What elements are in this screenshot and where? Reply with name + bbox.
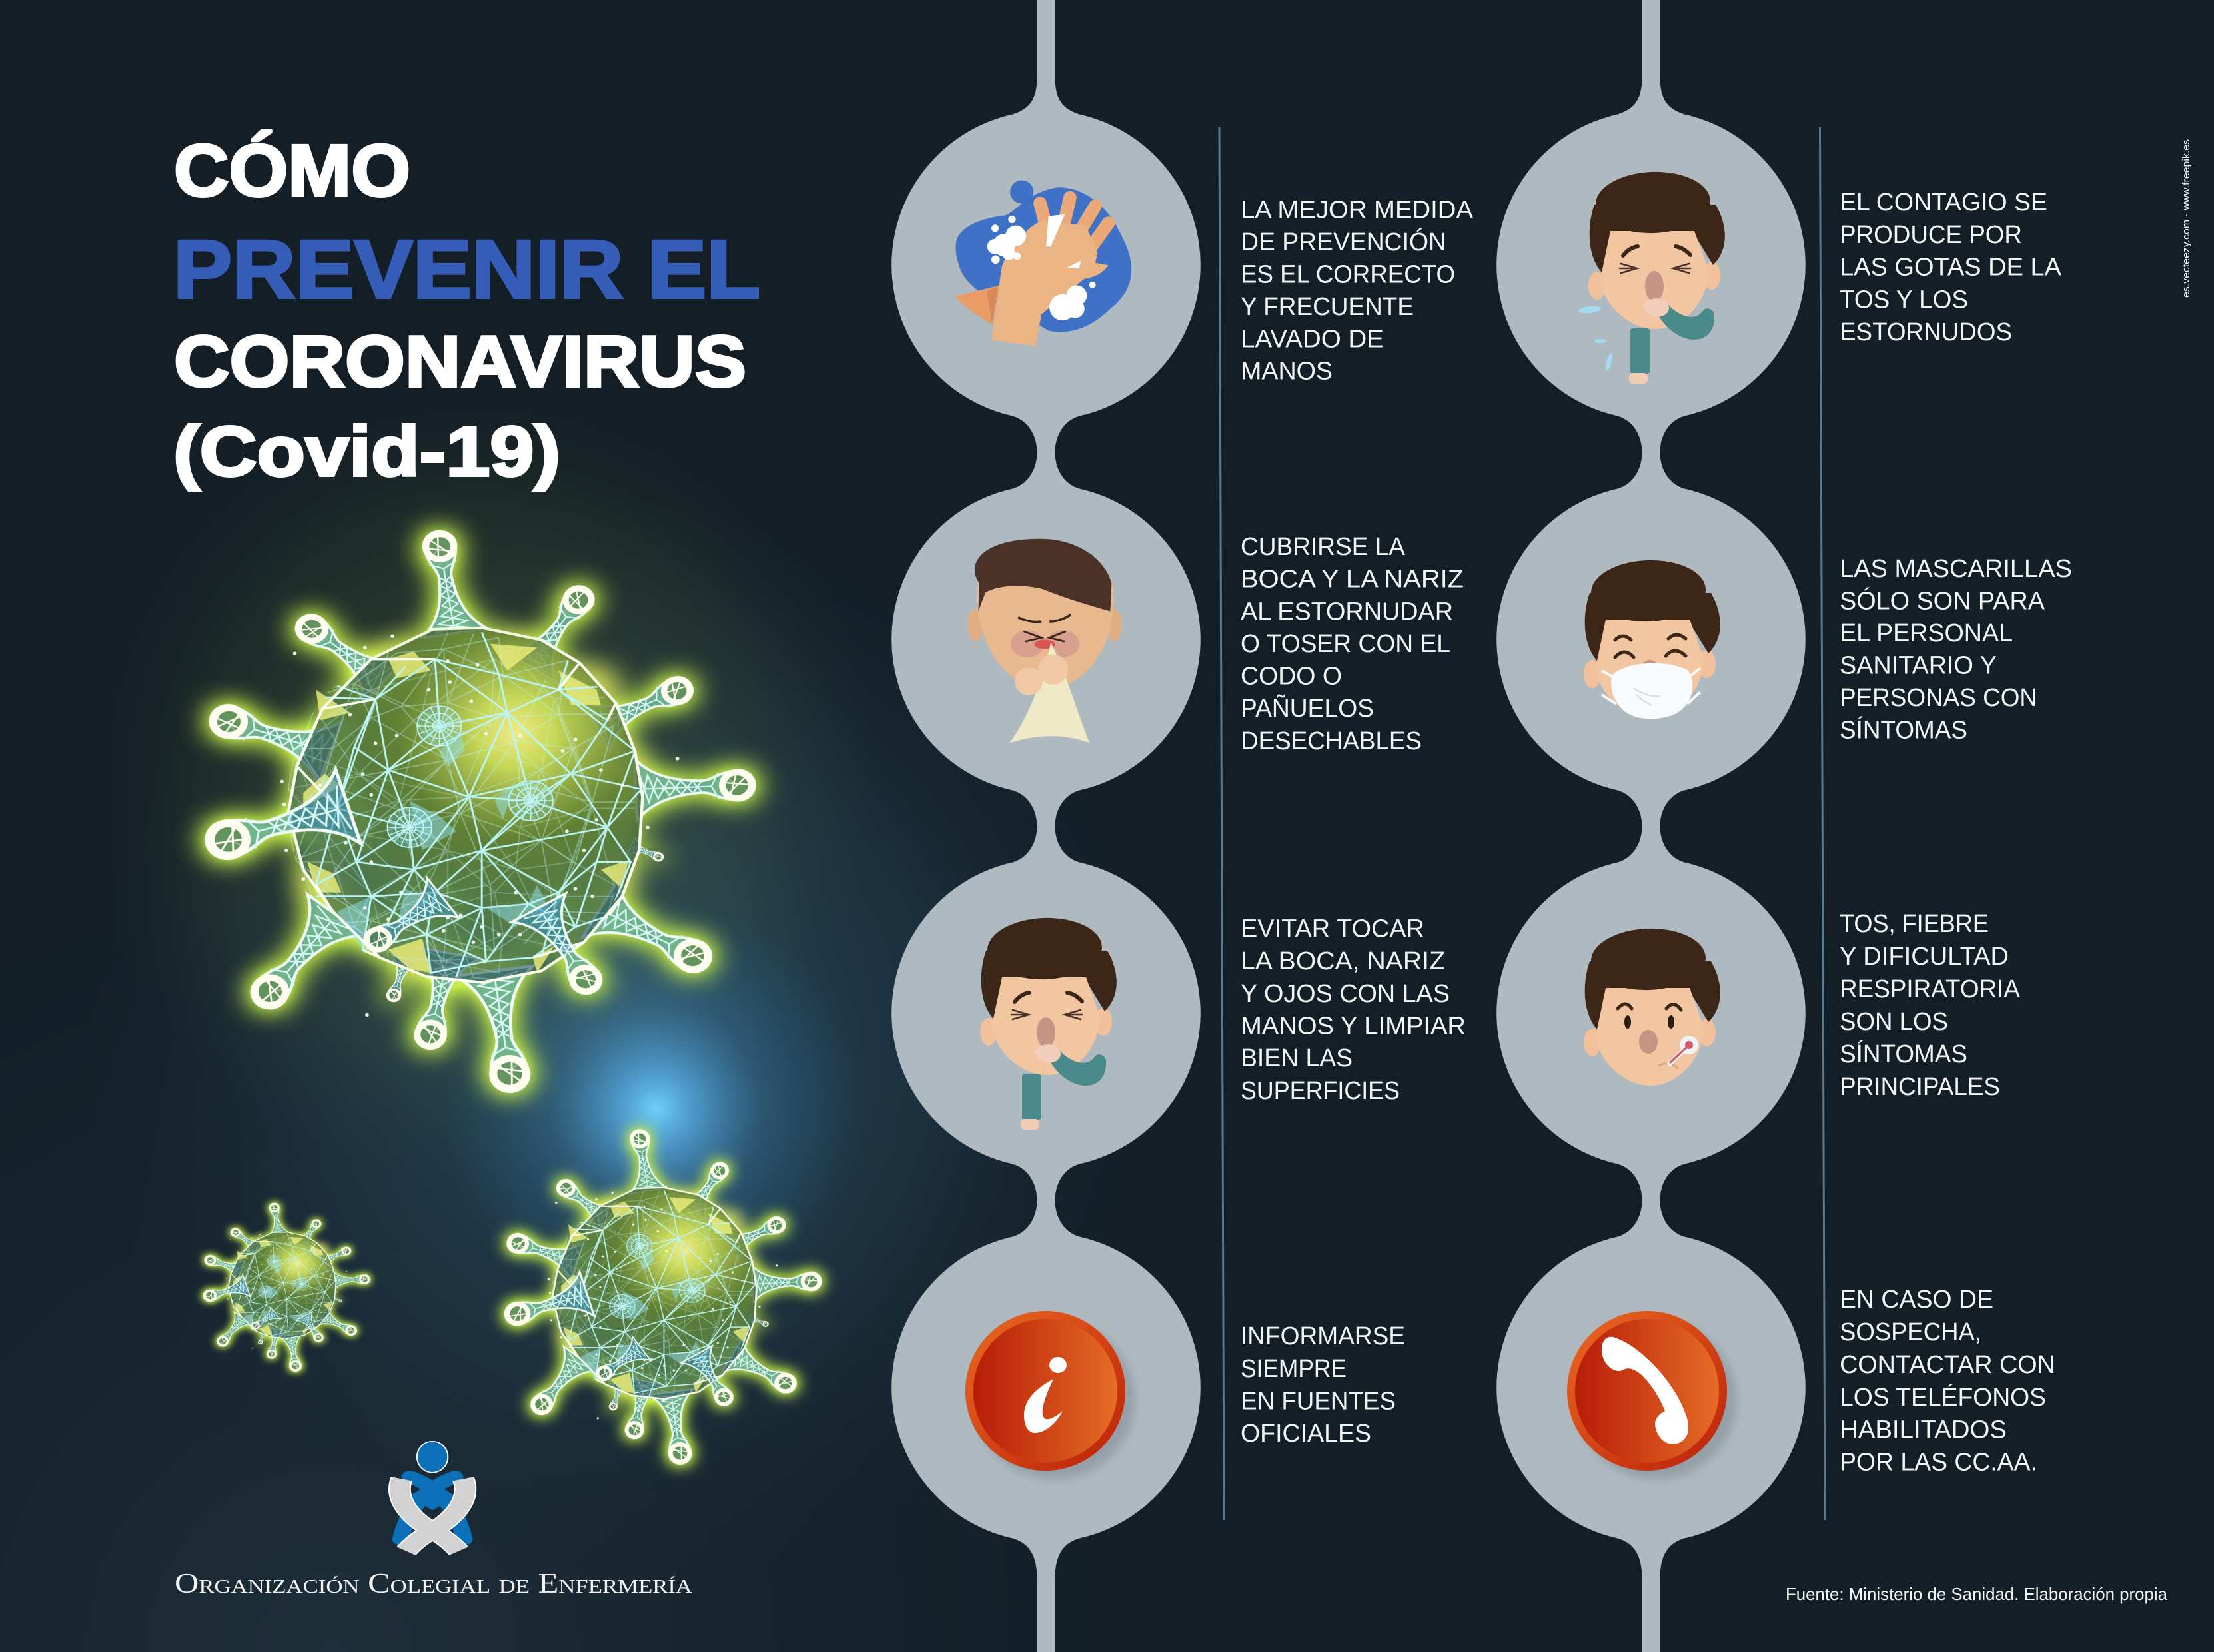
text: symptoms [1840,910,2021,1101]
text: official sources: OFICIALES [1241,1420,1371,1447]
text: suspicion contact: HABILITADOS [1840,1416,2007,1444]
text: symptoms: SÍNTOMAS [1840,1040,1967,1068]
text: contagion: TOS Y LOS [1840,286,1968,314]
title: PREVENIR EL [173,224,760,316]
text: hand washing: Y FRECUENTE [1241,293,1414,321]
virus: small [200,1202,370,1372]
image credit: es.vecteezy.com - www.freepik.es [2181,139,2192,298]
icon: boy coughing [1578,170,1725,384]
text: avoid touching: SUPERFICIES [1241,1077,1400,1105]
text: suspicion contact: EN CASO DE [1840,1286,1993,1314]
text: avoid touching: EVITAR TOCAR [1241,915,1424,943]
text: hand washing: MANOS [1241,357,1333,385]
text: masks: SÓLO SON PARA [1840,586,2045,616]
text: contagion: PRODUCE POR [1840,221,2022,249]
text: masks: PERSONAS CON [1840,684,2037,712]
text: suspicion contact [1840,1286,2055,1477]
text: contagion: EL CONTAGIO SE [1840,189,2047,216]
text: official sources [1241,1322,1405,1447]
text: contagion: ESTORNUDOS [1840,318,2012,346]
icon: boy covering mouth [980,916,1117,1130]
text: hand washing: LA MEJOR MEDIDA [1241,196,1474,224]
text: symptoms: PRINCIPALES [1840,1073,2000,1101]
text: official sources: INFORMARSE [1241,1322,1405,1350]
text: avoid touching: MANOS Y LIMPIAR [1241,1013,1466,1040]
text: suspicion contact: CONTACTAR CON [1840,1351,2055,1379]
text: covering coughs [1241,533,1464,755]
text: avoid touching: BIEN LAS [1241,1044,1353,1072]
divider: left [1219,127,1224,1520]
text: avoid touching: Y OJOS CON LAS [1241,980,1450,1008]
text: hand washing: ES EL CORRECTO [1241,261,1455,289]
logo figure [400,1442,465,1551]
text: contagion: LAS GOTAS DE LA [1840,253,2062,281]
source note: Fuente: Ministerio de Sanidad. Elaboración propia [1786,1584,2168,1604]
text: covering coughs: CODO O [1241,663,1342,691]
title: CÓMO [174,130,410,212]
text: covering coughs: PAÑUELOS [1241,694,1374,723]
text: masks: LAS MASCARILLAS [1840,555,2072,583]
text: symptoms: RESPIRATORIA [1840,975,2021,1003]
icon: hand washing [955,181,1131,346]
icon: boy with face mask [1584,558,1720,719]
logo wordmark: Organización Colegial de Enfermería [175,1569,692,1599]
text: symptoms: Y DIFICULTAD [1840,943,2009,971]
text: covering coughs: O TOSER CON EL [1241,630,1450,658]
text: hand washing [1241,196,1474,385]
droplets [1578,305,1614,371]
text: hand washing: DE PREVENCIÓN [1241,228,1446,256]
title [173,130,760,491]
text: masks: EL PERSONAL [1840,620,2013,647]
virus: large [195,527,756,1096]
text: hand washing: LAVADO DE [1241,325,1384,353]
text: symptoms: TOS, FIEBRE [1840,910,1989,938]
icon: boy with thermometer [1584,927,1720,1086]
text: official sources: EN FUENTES [1241,1387,1396,1415]
title: CORONAVIRUS [174,321,746,402]
text: covering coughs: AL ESTORNUDAR [1241,598,1453,625]
text: masks: SÍNTOMAS [1840,715,1967,745]
text: covering coughs: DESECHABLES [1241,727,1422,755]
icon: boy sneezing into tissue [967,539,1121,743]
text: covering coughs: CUBRIRSE LA [1241,533,1406,561]
divider: right [1820,127,1825,1520]
text: contagion [1840,189,2062,346]
text: masks [1840,555,2072,745]
icon: phone button [1567,1311,1736,1479]
text: suspicion contact: POR LAS CC.AA. [1840,1449,2037,1477]
text: symptoms: SON LOS [1840,1008,1948,1036]
chain: left column [891,0,1201,1652]
virus: medium [498,1127,822,1467]
title: (Covid-19) [173,412,560,491]
text: masks: SANITARIO Y [1840,651,1997,679]
text: official sources: SIEMPRE [1241,1355,1347,1383]
logo: Organización Colegial de Enfermería [175,1442,692,1599]
text: suspicion contact: LOS TELÉFONOS [1840,1383,2046,1412]
text: avoid touching [1241,915,1466,1105]
chain: right column [1496,0,1806,1652]
text: suspicion contact: SOSPECHA, [1840,1318,1981,1346]
text: avoid touching: LA BOCA, NARIZ [1241,947,1445,975]
icon: alert information button [965,1311,1135,1479]
text: covering coughs: BOCA Y LA NARIZ [1241,566,1464,594]
